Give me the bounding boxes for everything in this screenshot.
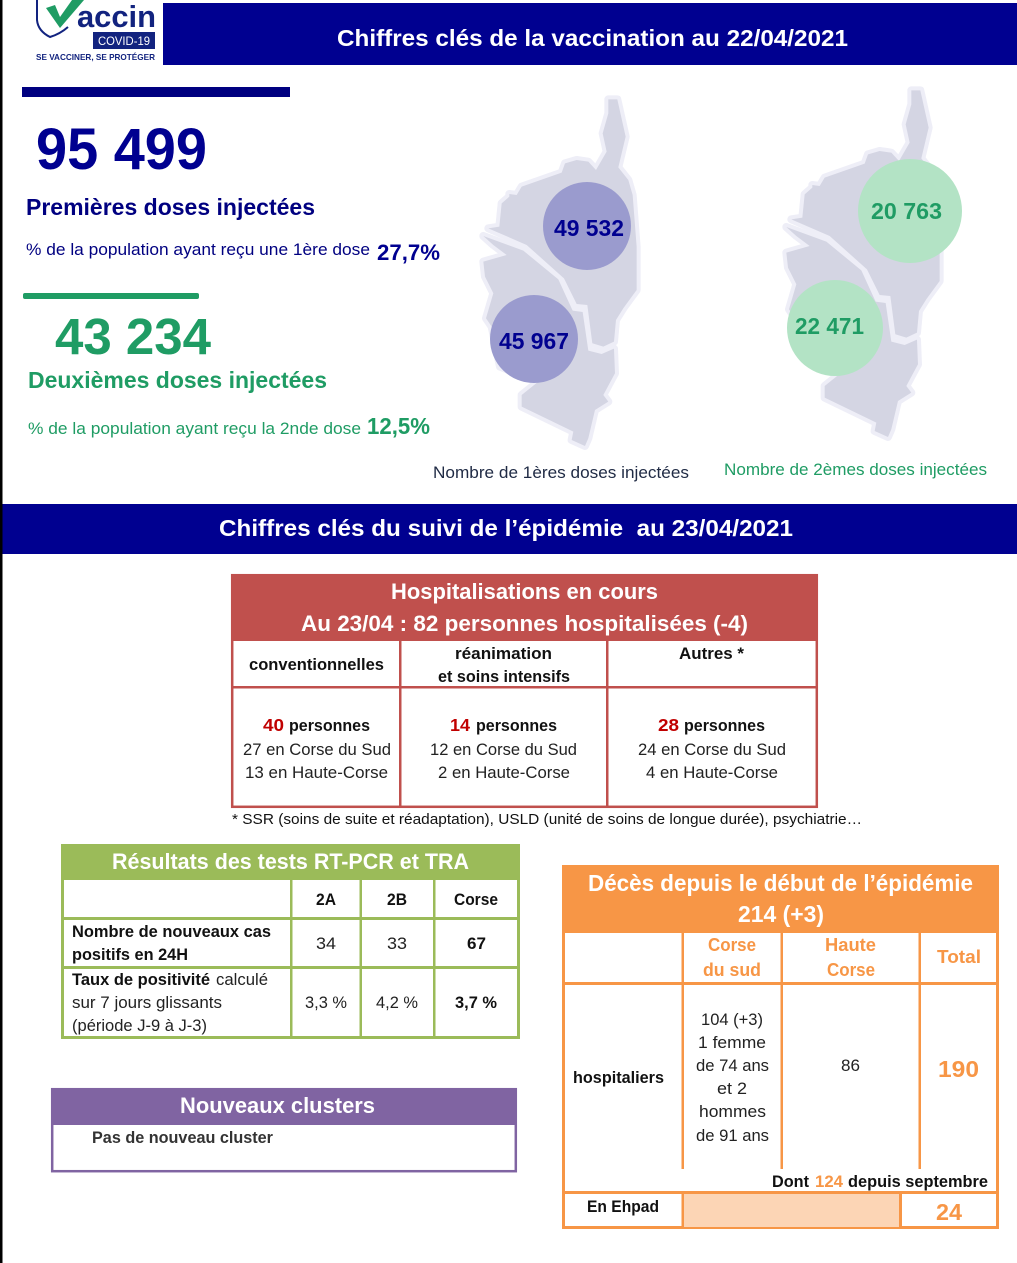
panel: deaths table: hospitaliers: [573, 1069, 664, 1087]
panel: RT-PCR and TRA test results table: [61, 844, 520, 1038]
map: second doses by department: 22 471: [795, 313, 864, 339]
panel: deaths table: Corse: [827, 960, 875, 980]
panel: deaths table: de 74 ans: [696, 1057, 769, 1075]
map: first doses by department: Nombre de 1ères doses injectées: [433, 463, 689, 482]
panel: first doses: 27,7%: [377, 240, 440, 265]
title banner: epidemic follow-up: Chiffres clés du suivi de l’épidémie au 23/04/2021: [219, 515, 793, 541]
panel: RT-PCR and TRA test results table: Résultats des tests RT-PCR et TRA: [112, 849, 469, 874]
panel: deaths table: de 91 ans: [696, 1127, 769, 1145]
map: second doses by department: Nombre de 2èmes doses injectées: [724, 460, 987, 479]
panel: hospitalisations table: 4 en Haute-Corse: [646, 764, 778, 782]
panel: hospitalisations table: 40: [263, 715, 284, 735]
panel: hospitalisations table: 2 en Haute-Corse: [438, 764, 570, 782]
map: first doses by department: 49 532: [554, 215, 624, 241]
panel: RT-PCR and TRA test results table: 2A: [316, 891, 336, 909]
logo: Vaccin COVID-19: accin: [77, 0, 156, 34]
panel: hospitalisations table: réanimation: [455, 645, 552, 663]
map: first doses by department: [433, 99, 689, 482]
panel: deaths table: hommes: [699, 1103, 766, 1121]
panel: second doses: Deuxièmes doses injectées: [28, 367, 327, 393]
panel: new clusters: [51, 1088, 517, 1171]
panel: RT-PCR and TRA test results table: 3,3 %: [305, 994, 347, 1012]
logo: Vaccin COVID-19: COVID-19: [98, 36, 150, 48]
map: second doses by department: 20 763: [871, 198, 942, 224]
panel: second doses: 43 234: [55, 308, 212, 365]
panel: second doses: 12,5%: [367, 413, 430, 439]
panel: deaths table: Corse: [708, 935, 756, 955]
panel: second doses: % de la population ayant reçu la 2nde dose: [28, 419, 361, 438]
panel: first doses: % de la population ayant reçu une 1ère dose: [26, 240, 370, 259]
panel: hospitalisations table: [231, 574, 818, 807]
panel: deaths table: Décès depuis le début de l’épidémie: [588, 870, 973, 896]
panel: RT-PCR and TRA test results table: 67: [467, 935, 486, 953]
panel: deaths table: 214 (+3): [738, 901, 824, 927]
panel: RT-PCR and TRA test results table: 3,7 %: [455, 994, 497, 1012]
panel: RT-PCR and TRA test results table: calculé: [216, 971, 268, 989]
map: second doses by department: [724, 90, 987, 479]
panel: deaths table: Total: [937, 947, 981, 967]
panel: deaths table: [562, 865, 999, 1228]
panel: second doses: [23, 293, 430, 439]
panel: hospitalisations table: Hospitalisations en cours: [391, 579, 658, 604]
panel: deaths table: 104 (+3): [701, 1011, 763, 1029]
panel: new clusters: Pas de nouveau cluster: [92, 1129, 274, 1147]
title banner: vaccination: [163, 3, 1017, 65]
panel: deaths table: Haute: [825, 935, 876, 955]
panel: RT-PCR and TRA test results table: positifs en 24H: [72, 946, 188, 964]
panel: hospitalisations table: 14: [450, 715, 470, 735]
panel: deaths table: du sud: [703, 960, 761, 980]
panel: hospitalisations table: et soins intensifs: [438, 668, 570, 686]
panel: deaths table: 1 femme: [698, 1034, 766, 1052]
panel: RT-PCR and TRA test results table: 2B: [387, 891, 407, 909]
panel: hospitalisations table: 24 en Corse du Sud: [638, 741, 786, 759]
panel: first doses: 95 499: [36, 117, 207, 182]
panel: deaths table: 86: [841, 1057, 860, 1075]
panel: hospitalisations table: 12 en Corse du Sud: [430, 741, 577, 759]
footnote: hospitalisations: * SSR (soins de suite et réadaptation), USLD (unité de soins de longue durée), psychiatrie…: [232, 811, 862, 828]
panel: hospitalisations table: 27 en Corse du Sud: [243, 741, 391, 759]
panel: RT-PCR and TRA test results table: sur 7 jours glissants: [72, 994, 222, 1012]
panel: hospitalisations table: Autres *: [679, 645, 745, 663]
panel: hospitalisations table: personnes: [684, 717, 765, 735]
logo: Vaccin COVID-19: SE VACCINER, SE PROTÉGER: [36, 52, 155, 62]
title banner: vaccination: Chiffres clés de la vaccination au 22/04/2021: [337, 25, 848, 51]
panel: RT-PCR and TRA test results table: 34: [316, 935, 336, 953]
panel: RT-PCR and TRA test results table: Nombre de nouveaux cas: [72, 923, 271, 941]
map: first doses by department: 45 967: [499, 328, 569, 354]
panel: hospitalisations table: 13 en Haute-Corse: [245, 764, 388, 782]
panel: deaths table: Dont: [772, 1173, 809, 1191]
panel: first doses: Premières doses injectées: [26, 194, 315, 220]
panel: RT-PCR and TRA test results table: 4,2 %: [376, 994, 418, 1012]
panel: first doses: [22, 87, 440, 265]
logo: Vaccin COVID-19: [36, 0, 156, 62]
panel: hospitalisations table: 28: [658, 715, 679, 735]
panel: new clusters: Nouveaux clusters: [180, 1093, 375, 1118]
panel: deaths table: 190: [938, 1056, 979, 1082]
panel: deaths table: et 2: [717, 1080, 747, 1098]
panel: hospitalisations table: Au 23/04 : 82 personnes hospitalisées (-4): [301, 611, 748, 636]
panel: deaths table: En Ehpad: [587, 1198, 659, 1216]
panel: deaths table: 124: [815, 1173, 844, 1191]
panel: hospitalisations table: conventionnelles: [249, 656, 384, 674]
panel: RT-PCR and TRA test results table: 33: [387, 935, 407, 953]
panel: hospitalisations table: personnes: [289, 717, 370, 735]
panel: hospitalisations table: personnes: [476, 717, 557, 735]
panel: deaths table: 24: [936, 1199, 962, 1225]
panel: RT-PCR and TRA test results table: (période J-9 à J-3): [72, 1017, 207, 1035]
panel: RT-PCR and TRA test results table: Corse: [454, 891, 498, 909]
panel: deaths table: depuis septembre: [848, 1173, 988, 1191]
title banner: epidemic follow-up: [2, 504, 1017, 554]
panel: RT-PCR and TRA test results table: Taux de positivité: [72, 971, 210, 989]
